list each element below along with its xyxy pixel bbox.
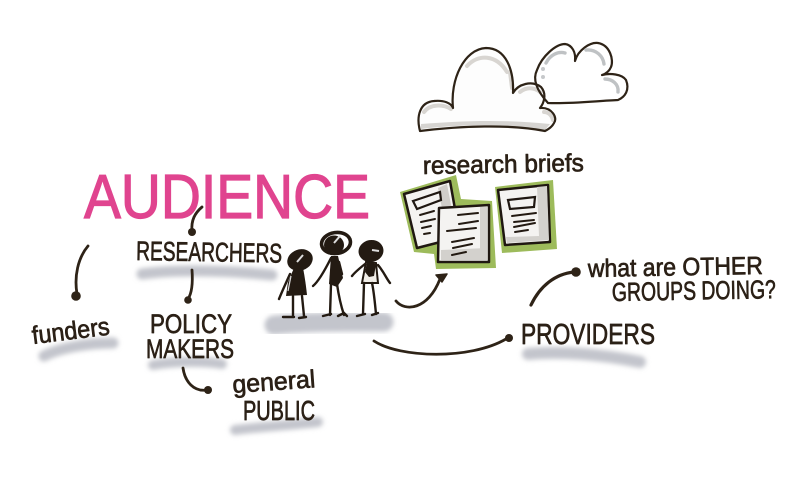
heading: research briefs: research briefs: [423, 149, 584, 180]
document: right brief: [495, 180, 557, 253]
title: AUDIENCE: [84, 163, 370, 232]
heading: researchers: RESEARCHERS: [136, 236, 282, 269]
panel: research brief documents: [400, 175, 557, 269]
heading: researchers: [136, 236, 282, 275]
label: policy makers: MAKERS: [146, 334, 234, 364]
arrow: providers to question: [531, 267, 581, 305]
label: general public: general: [231, 365, 316, 399]
person: right: [352, 238, 390, 316]
arrow: policy makers to general public: [183, 368, 212, 394]
heading: providers: PROVIDERS: [521, 319, 655, 351]
icon: small cloud: [535, 43, 627, 103]
heading: providers: [521, 319, 655, 362]
callout: what are other groups doing: [587, 252, 776, 307]
arrow: researchers to policy makers: [184, 270, 192, 304]
label: policy makers: [146, 309, 234, 365]
label: policy makers: POLICY: [150, 309, 232, 339]
person: middle: [313, 231, 352, 316]
illustration: three people: [274, 231, 390, 325]
arrow: people to providers: [374, 334, 513, 354]
callout: what are other groups doing: what are OTHER: [587, 252, 763, 283]
arrow: title to researchers: [188, 207, 202, 236]
arrow: funders: [71, 246, 88, 301]
icon: large cloud: [419, 48, 555, 131]
label: funders: funders: [30, 313, 111, 350]
arrow: people to research briefs: [396, 274, 447, 307]
document: left brief: [400, 175, 496, 269]
person: left: [279, 246, 316, 318]
label: general public: [231, 365, 318, 430]
label: general public: PUBLIC: [243, 395, 315, 426]
document: middle brief: [438, 205, 489, 262]
ground shadow: [274, 322, 384, 325]
